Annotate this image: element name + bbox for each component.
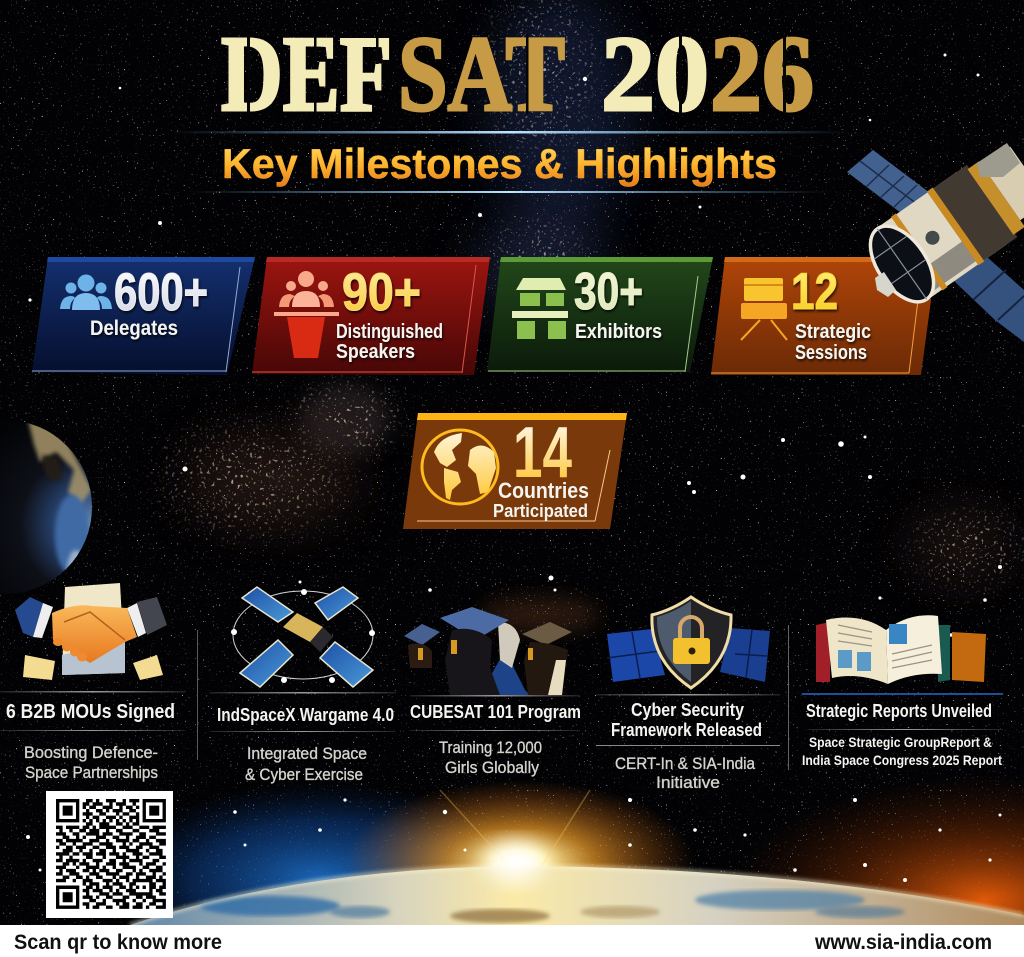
panel: cubesat: CUBESAT 101 Program	[410, 702, 581, 722]
card: speakers: Distinguished	[336, 321, 443, 343]
title: DEFSAT 2026: 26	[710, 15, 814, 134]
subtitle: Key Milestones & Highlights	[222, 140, 777, 187]
panel: wargame: IndSpaceX Wargame 4.0	[217, 705, 394, 725]
icon: session board	[741, 278, 787, 340]
panel: reports	[802, 615, 1003, 768]
card: sessions	[711, 257, 931, 375]
icon: open book	[816, 615, 986, 684]
card: countries: Participated	[493, 501, 588, 521]
panel: wargame: & Cyber Exercise	[245, 765, 363, 784]
panel: cubesat	[404, 607, 581, 777]
card: sessions: 12	[791, 263, 838, 321]
panel: cyber security: Cyber Security	[631, 700, 744, 720]
card: speakers	[252, 257, 490, 375]
card: exhibitors: Exhibitors	[575, 321, 662, 343]
card: sessions: Sessions	[795, 342, 867, 364]
panel: MOUs: 6 B2B MOUs Signed	[6, 701, 175, 723]
card: exhibitors	[487, 257, 713, 372]
card: delegates	[32, 257, 255, 375]
panel: cubesat: Training 12,000	[439, 738, 542, 757]
satellite	[847, 138, 1024, 342]
footer text: website: www.sia-india.com	[814, 931, 992, 954]
title: DEFSAT 2026	[221, 15, 814, 134]
panel: MOUs	[0, 583, 186, 782]
column divider	[788, 625, 789, 770]
icon: people	[60, 274, 112, 310]
card: speakers: 90+	[342, 263, 421, 322]
sunrise earth horizon	[26, 775, 1024, 925]
card: exhibitors: 30+	[574, 263, 643, 321]
footer text: scan QR: Scan qr to know more	[14, 931, 222, 954]
panel: reports: Space Strategic GroupReport &	[809, 734, 992, 750]
card: delegates: Delegates	[90, 317, 178, 340]
title: DEFSAT 2026: 20	[601, 15, 709, 134]
panel: cyber security: CERT-In & SIA-India	[615, 754, 755, 773]
card: countries	[403, 413, 627, 529]
title: DEFSAT 2026: SAT	[398, 15, 565, 134]
icon: speaker podium	[274, 271, 339, 358]
icon: handshake	[15, 583, 167, 680]
icon: graduates	[404, 607, 572, 695]
card: countries: 14	[513, 413, 572, 493]
icon: exhibition booth	[512, 278, 568, 339]
title: DEFSAT 2026: DEF	[221, 15, 392, 134]
icon: globe	[422, 430, 498, 504]
icon: satellite X	[231, 587, 375, 687]
panel: cubesat: Girls Globally	[445, 758, 539, 777]
card: sessions: Strategic	[795, 321, 871, 343]
QR code	[46, 791, 173, 918]
card: countries: Countries	[498, 478, 589, 503]
icon: shield with padlock	[607, 597, 770, 688]
panel: cyber security: Initiative	[656, 773, 720, 792]
planet at left	[0, 420, 92, 594]
glowing divider lines	[170, 131, 850, 193]
panel: cyber security	[596, 597, 780, 792]
panel: wargame	[210, 587, 396, 784]
panel: MOUs: Space Partnerships	[25, 763, 158, 782]
panel: MOUs: Boosting Defence-	[24, 743, 158, 762]
card: speakers: Speakers	[336, 341, 415, 363]
card: delegates: 600+	[114, 263, 208, 322]
panel: cyber security: Framework Released	[611, 720, 762, 740]
panel: wargame: Integrated Space	[247, 744, 367, 763]
footer band	[0, 925, 1024, 957]
column divider	[197, 630, 198, 760]
